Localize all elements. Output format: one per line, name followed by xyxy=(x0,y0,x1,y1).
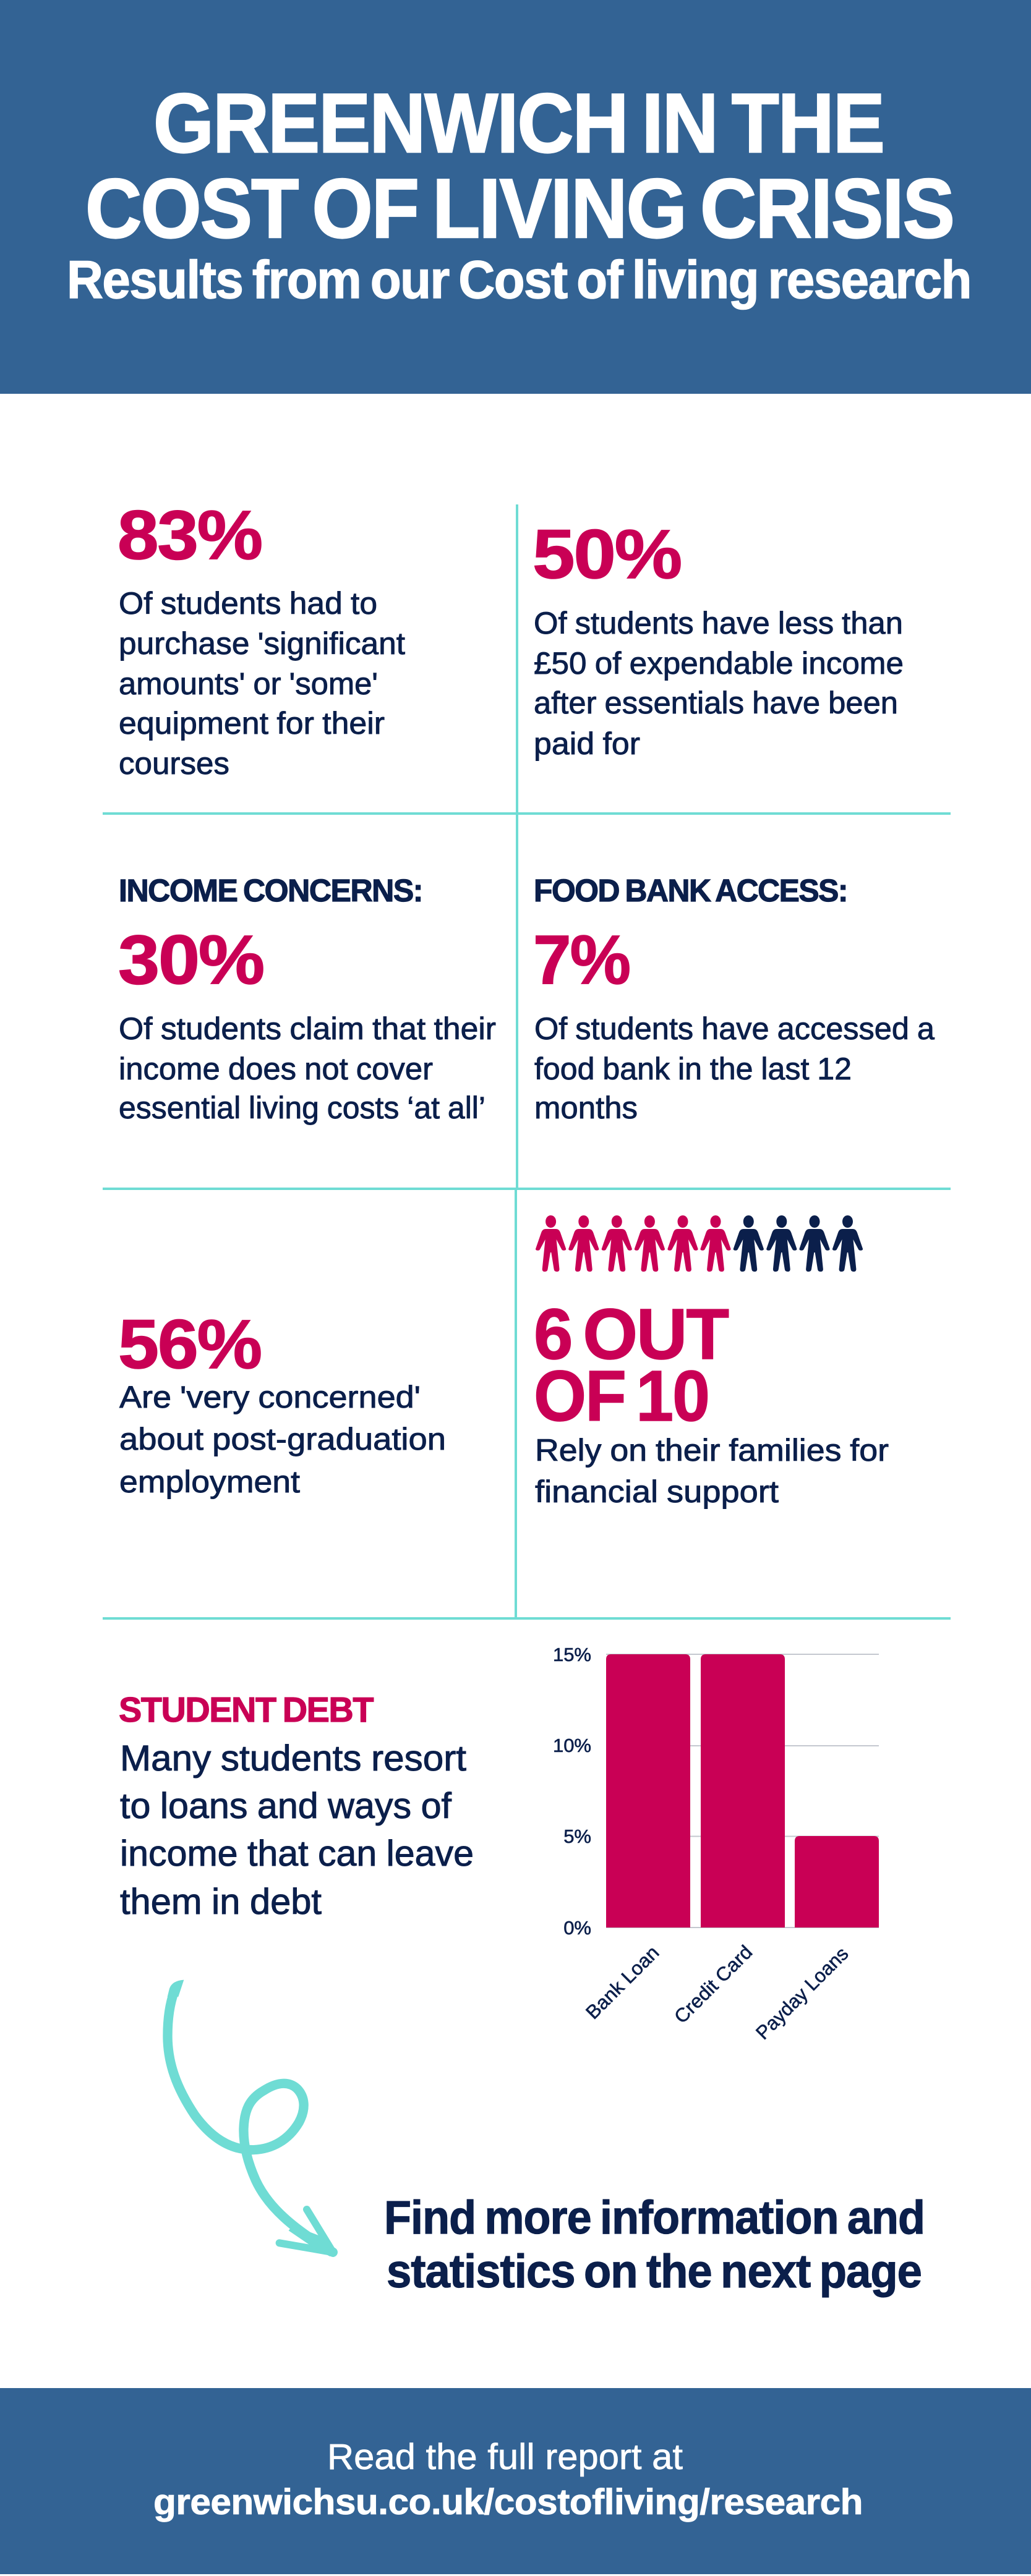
panel: 83% equipment stat: 83% xyxy=(118,496,262,574)
panel: food bank access stat: 7% xyxy=(533,921,630,998)
panel: food bank access stat: Of students have accessed a xyxy=(534,1011,935,1046)
x axis labels: Bank Loan xyxy=(581,1942,663,2023)
panel: student debt text: STUDENT DEBT xyxy=(119,1690,374,1730)
panel: income concerns stat: income does not cover xyxy=(119,1052,433,1086)
text: rely on families xyxy=(535,1433,889,1509)
panel: 83% equipment stat: amounts' or 'some' xyxy=(119,666,378,701)
panel: student debt text xyxy=(119,1690,474,1922)
panel: income concerns stat xyxy=(118,873,496,1125)
bars xyxy=(606,1654,879,1928)
panel: student debt text: to loans and ways of xyxy=(120,1786,452,1826)
panel: 83% equipment stat: Of students had to xyxy=(119,586,377,621)
panel: student debt text: Many students resort xyxy=(120,1738,466,1779)
call to action text xyxy=(384,2191,925,2298)
panel: 50% expendable income stat: £50 of expendable income xyxy=(534,646,904,681)
panel: income concerns stat: INCOME CONCERNS: xyxy=(119,873,422,908)
y axis labels: 10% xyxy=(553,1735,591,1756)
text: rely on families: Rely on their families for xyxy=(535,1433,889,1468)
call to action text: statistics on the next page xyxy=(387,2245,922,2298)
panel: 50% expendable income stat: paid for xyxy=(534,726,640,761)
text: report url: greenwichsu.co.uk/costofliving/research xyxy=(153,2482,863,2522)
panel: 50% expendable income stat: Of students have less than xyxy=(534,606,903,640)
panel: income concerns stat: Of students claim that their xyxy=(119,1011,496,1046)
y axis labels: 0% xyxy=(563,1917,591,1939)
panel: 50% expendable income stat: 50% xyxy=(533,516,681,593)
panel: 83% equipment stat xyxy=(118,496,405,781)
panel: 83% equipment stat: equipment for their xyxy=(119,706,385,741)
panel: footer banner xyxy=(0,2388,1031,2574)
text: rely on families: financial support xyxy=(535,1474,779,1509)
x axis labels: Payday Loans xyxy=(751,1943,853,2044)
y axis labels: 15% xyxy=(553,1644,591,1665)
title xyxy=(85,76,954,255)
x axis labels: Credit Card xyxy=(670,1941,756,2028)
panel: food bank access stat: food bank in the last 12 xyxy=(534,1052,852,1086)
panel: food bank access stat: months xyxy=(534,1090,638,1125)
panel: post-graduation employment stat: 56% xyxy=(118,1306,261,1383)
panel: header banner xyxy=(0,0,1031,394)
title: GREENWICH IN THE xyxy=(153,76,884,170)
panel: 83% equipment stat: purchase 'significant xyxy=(119,626,405,661)
icon: row of ten people, six highlighted xyxy=(536,1215,863,1272)
bar chart: student debt sources xyxy=(553,1644,879,2044)
stat: 6 out of 10 xyxy=(534,1294,729,1436)
panel: post-graduation employment stat: employment xyxy=(119,1464,300,1499)
call to action text: Find more information and xyxy=(384,2191,925,2244)
panel: income concerns stat: essential living costs ‘at all’ xyxy=(119,1090,486,1125)
text: read the full report: Read the full report at xyxy=(327,2437,683,2477)
title: COST OF LIVING CRISIS xyxy=(85,161,954,255)
panel: food bank access stat: FOOD BANK ACCESS: xyxy=(534,873,847,908)
y axis labels: 5% xyxy=(563,1826,591,1847)
panel: post-graduation employment stat xyxy=(118,1306,446,1499)
panel: post-graduation employment stat: about post-graduation xyxy=(119,1422,446,1456)
y axis labels xyxy=(553,1644,591,1939)
arrow: looping arrow to next-page text xyxy=(168,1980,336,2256)
panel: student debt text: income that can leave xyxy=(120,1834,474,1874)
panel: 50% expendable income stat: after essentials have been xyxy=(534,686,898,720)
panel: income concerns stat: 30% xyxy=(118,921,263,998)
grid divider lines xyxy=(103,504,951,1620)
subtitle: Results from our Cost of living research xyxy=(67,250,971,310)
x axis labels xyxy=(581,1941,853,2044)
panel: 83% equipment stat: courses xyxy=(119,746,229,781)
panel: family financial support stat xyxy=(534,1215,889,1509)
panel: student debt text: them in debt xyxy=(120,1882,322,1922)
panel: 50% expendable income stat xyxy=(533,516,904,761)
stat: 6 out of 10: OF 10 xyxy=(534,1356,709,1436)
stat: 6 out of 10: 6 OUT xyxy=(534,1294,729,1374)
panel: food bank access stat xyxy=(533,873,935,1125)
panel: post-graduation employment stat: Are 'very concerned' xyxy=(119,1380,421,1414)
